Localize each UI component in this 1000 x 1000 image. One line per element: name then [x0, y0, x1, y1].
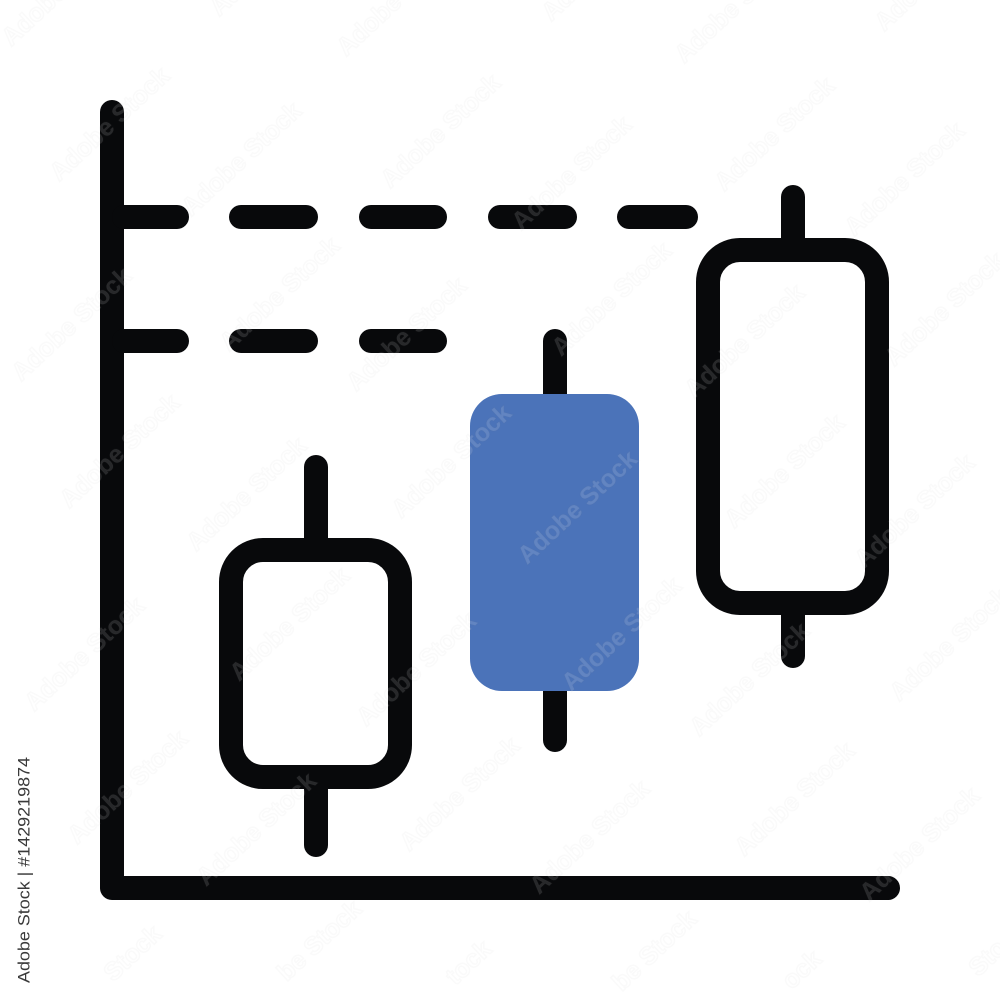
repeated diagonal watermark: Adobe Stock	[679, 279, 810, 403]
left hollow candlestick	[231, 467, 400, 845]
repeated diagonal watermark: Adobe Stock	[54, 389, 185, 513]
repeated diagonal watermark: ock	[776, 945, 827, 995]
repeated diagonal watermark: Adobe Stock	[214, 232, 345, 356]
repeated diagonal watermark: be Stock	[607, 905, 702, 996]
repeated diagonal watermark: Adobe Stock	[19, 592, 150, 716]
repeated diagonal watermark: Adobe Stock	[729, 737, 860, 861]
repeated diagonal watermark: Adobe Stock	[506, 111, 637, 235]
repeated diagonal watermark: Adobe Stock	[839, 117, 970, 241]
repeated diagonal watermark: Adobe Stock	[512, 445, 643, 569]
repeated diagonal watermark: Stock	[98, 920, 167, 987]
right hollow candlestick	[708, 197, 877, 656]
repeated diagonal watermark: Adobe Stock	[719, 409, 850, 533]
repeated diagonal watermark: Adobe Stock	[386, 399, 517, 523]
repeated diagonal watermark: Adobe Stock	[849, 449, 980, 573]
repeated diagonal watermark: tock	[440, 935, 497, 990]
repeated diagonal watermark: Adobe Stock	[351, 607, 482, 731]
repeated diagonal watermark: Adobe Stock	[341, 272, 472, 396]
repeated diagonal watermark: Adobe Stock	[224, 562, 355, 686]
repeated diagonal watermark: be Stock	[272, 895, 367, 986]
repeated diagonal watermark: Adobe Stock	[524, 775, 655, 899]
repeated diagonal watermark: Adobe Stock	[176, 97, 307, 221]
repeated diagonal watermark: Adobe Stock	[62, 725, 193, 849]
stock image credit: Adobe Stock | #1429219874	[14, 757, 34, 983]
repeated diagonal watermark: Adobe Stock	[556, 572, 687, 696]
repeated diagonal watermark: Adobe Stock	[44, 62, 175, 186]
repeated diagonal watermark: Adobe Stock	[854, 782, 985, 906]
repeated diagonal watermark: Adobe Stock	[684, 617, 815, 741]
lower dashed level line	[124, 329, 435, 353]
repeated diagonal watermark: Adobe Stock	[181, 432, 312, 556]
middle filled blue candlestick	[470, 341, 639, 740]
repeated diagonal watermark: Adobe Stock	[6, 262, 137, 386]
repeated diagonal watermark: Adobe Stock	[375, 69, 506, 193]
chart axes	[112, 112, 888, 888]
repeated diagonal watermark: Adobe Stock	[709, 72, 840, 196]
repeated diagonal watermark: Adobe Stock	[394, 732, 525, 856]
upper dashed level line	[124, 205, 686, 229]
repeated diagonal watermark: Adobe Stock	[546, 237, 677, 361]
repeated diagonal watermark: Adobe Stock	[191, 767, 322, 891]
